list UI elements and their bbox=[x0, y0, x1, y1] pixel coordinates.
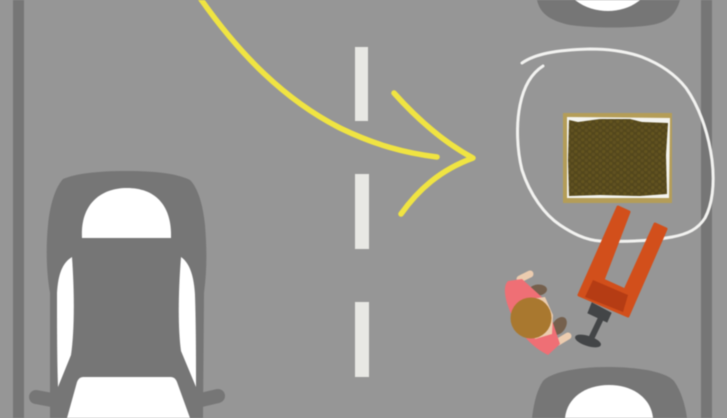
white chalk circle around the load bbox=[518, 49, 713, 241]
pallet jack bbox=[574, 207, 666, 349]
crate of goods bbox=[563, 113, 672, 203]
worker shoes bbox=[529, 284, 547, 296]
parked car: bottom left bbox=[36, 171, 218, 418]
worker seen from above bbox=[505, 274, 570, 355]
car right side window bbox=[179, 257, 196, 387]
car rear window bbox=[67, 377, 190, 418]
jack frame shadow panel bbox=[585, 280, 628, 312]
worker shoulders bbox=[523, 297, 553, 339]
jack handle bbox=[574, 303, 611, 349]
worker hands bbox=[520, 274, 530, 279]
car body bbox=[47, 171, 206, 418]
parked car: top right bbox=[537, 0, 680, 28]
yellow direction arrow bbox=[200, 0, 473, 214]
worker head bbox=[510, 298, 552, 338]
parked car: bottom right bbox=[532, 367, 687, 418]
road edge line: right bbox=[701, 0, 712, 418]
worker shirt bbox=[505, 279, 560, 355]
road edge line: left bbox=[13, 0, 24, 418]
car windscreen bbox=[82, 188, 171, 238]
jack forks and frame bbox=[579, 207, 666, 316]
car mirrors bbox=[36, 396, 218, 400]
dashed centre line bbox=[355, 47, 369, 377]
car left side window bbox=[57, 257, 74, 387]
